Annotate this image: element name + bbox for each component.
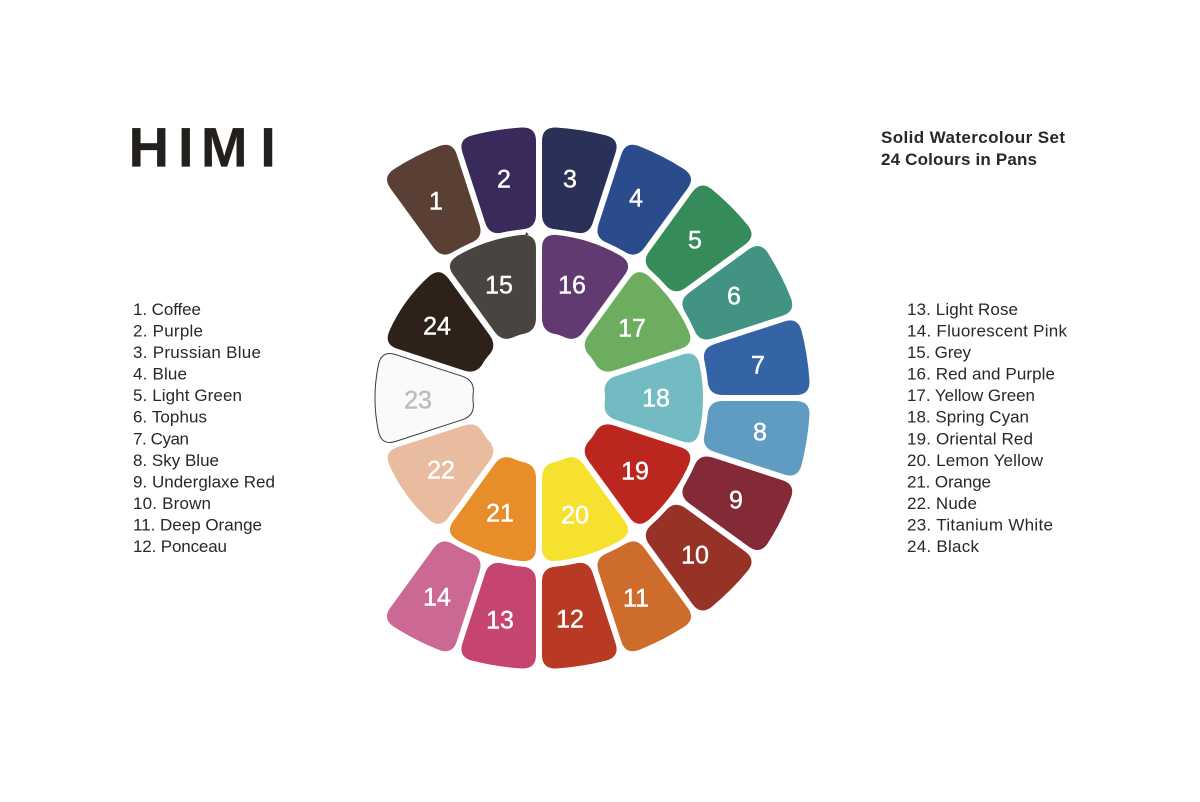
pan 3: Prussian Blue: 3 xyxy=(563,166,577,194)
pan 10: Brown xyxy=(632,491,757,616)
pan 4: Blue: 4 xyxy=(629,185,643,213)
pan 20: Lemon Yellow xyxy=(517,447,632,568)
pan 15: Grey: 15 xyxy=(485,272,513,300)
pan 13: Light Rose: 13 xyxy=(486,607,514,635)
pan 6: Tophus: 6 xyxy=(727,283,741,311)
pan 21: Orange: 21 xyxy=(486,500,514,528)
outer ring of pans xyxy=(383,124,813,672)
pan 5: Light Green: 5 xyxy=(688,227,702,255)
pan 16: Red and Purple: 16 xyxy=(558,272,586,300)
pan 21: Orange xyxy=(446,447,561,568)
heading: product title: 24 Colours in Pans xyxy=(881,150,1037,169)
pan 3: Prussian Blue xyxy=(528,124,618,237)
legend item 10: 10. Brown xyxy=(133,494,211,513)
pan 6: Tophus xyxy=(673,242,798,355)
pan 19: Oriental Red xyxy=(566,401,698,530)
heading: product title xyxy=(881,128,1065,169)
legend item 22: 22. Nude xyxy=(907,494,977,513)
legend item 18: 18. Spring Cyan xyxy=(907,408,1029,427)
pan 23: Titanium White xyxy=(375,353,473,443)
pan 11: Deep Orange: 11 xyxy=(623,585,649,613)
pan 12: Ponceau: 12 xyxy=(556,606,584,634)
legend item 4: 4. Blue xyxy=(133,365,187,384)
legend item 8: 8. Sky Blue xyxy=(133,451,219,470)
legend item 2: 2. Purple xyxy=(133,322,203,340)
pan 24: Black: 24 xyxy=(423,313,451,341)
pan 16: Red and Purple xyxy=(517,228,632,349)
legend item 23: 23. Titanium White xyxy=(907,516,1053,534)
legend item 21: 21. Orange xyxy=(907,472,991,491)
heading: product title: Solid Watercolour Set xyxy=(881,128,1065,147)
pan 11: Deep Orange xyxy=(582,532,695,657)
inner ring of pans xyxy=(375,228,703,568)
pan 12: Ponceau xyxy=(528,559,618,672)
pan 1: Coffee: 1 xyxy=(429,188,443,216)
pan 7: Cyan xyxy=(700,319,813,409)
legend item 19: 19. Oriental Red xyxy=(907,429,1033,448)
legend item 3: 3. Prussian Blue xyxy=(133,343,261,362)
legend item 13: 13. Light Rose xyxy=(907,300,1018,319)
pan 15: Grey xyxy=(446,228,561,349)
pan 24: Black xyxy=(380,266,512,395)
pan 4: Blue xyxy=(582,139,695,264)
legend item 20: 20. Lemon Yellow xyxy=(907,451,1044,470)
pan 8: Sky Blue xyxy=(700,387,813,477)
pan 18: Spring Cyan: 18 xyxy=(642,385,670,413)
pan 1: Coffee xyxy=(383,139,496,264)
legend item 12: 12. Ponceau xyxy=(133,537,227,556)
legend item 16: 16. Red and Purple xyxy=(907,365,1055,384)
pan 9: Underglaxe Red xyxy=(673,441,798,554)
pan 2: Purple xyxy=(460,124,550,237)
legend item 1: 1. Coffee xyxy=(133,300,201,319)
pan 17: Yellow Green xyxy=(566,266,698,395)
legend item 11: 11. Deep Orange xyxy=(133,516,262,534)
legend item 15: 15. Grey xyxy=(907,343,972,362)
legend item 17: 17. Yellow Green xyxy=(907,386,1035,405)
legend item 5: 5. Light Green xyxy=(133,386,242,405)
pan 13: Light Rose xyxy=(460,559,550,672)
pan 17: Yellow Green: 17 xyxy=(618,315,646,343)
pan 8: Sky Blue: 8 xyxy=(753,419,767,447)
pan 14: Fluorescent Pink xyxy=(383,532,496,657)
pan 18: Spring Cyan xyxy=(605,353,703,443)
pan 9: Underglaxe Red: 9 xyxy=(729,487,743,515)
legend: colours 1 to 12 xyxy=(133,300,275,556)
legend item 24: 24. Black xyxy=(907,537,980,556)
pan 5: Light Green xyxy=(632,180,757,305)
legend item 6: 6. Tophus xyxy=(133,408,207,427)
pan 19: Oriental Red: 19 xyxy=(621,458,649,486)
colour wheel xyxy=(375,124,813,672)
pan 7: Cyan: 7 xyxy=(751,352,765,380)
pan 23: Titanium White: 23 xyxy=(404,387,432,415)
legend item 14: 14. Fluorescent Pink xyxy=(907,322,1068,340)
logo: HIMI: HIMI xyxy=(129,116,276,178)
pan 20: Lemon Yellow: 20 xyxy=(561,502,589,530)
pan 22: Nude xyxy=(380,401,512,530)
pan 2: Purple: 2 xyxy=(497,166,511,194)
pan 10: Brown: 10 xyxy=(681,542,709,570)
legend: colours 13 to 24 xyxy=(907,300,1068,556)
legend item 9: 9. Underglaxe Red xyxy=(133,472,275,491)
legend item 7: 7. Cyan xyxy=(133,429,189,448)
pan 14: Fluorescent Pink: 14 xyxy=(423,584,451,612)
pan 22: Nude: 22 xyxy=(427,457,455,485)
